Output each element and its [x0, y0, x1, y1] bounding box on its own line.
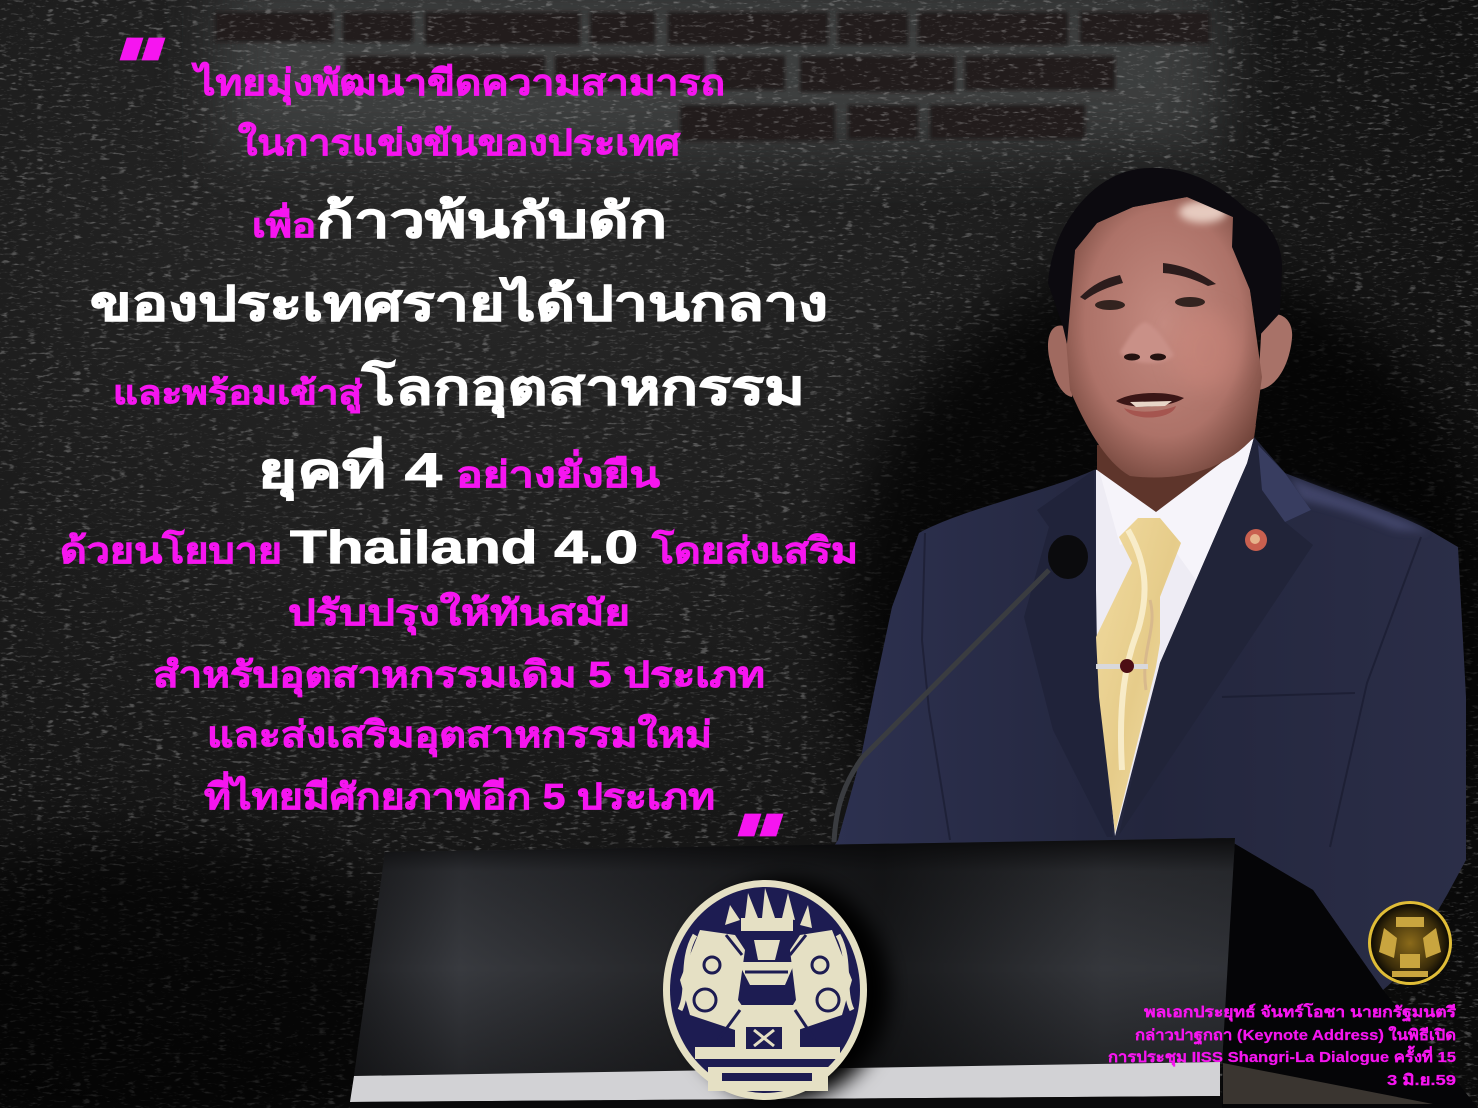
caption line 2: กล่าวปาฐกถา (Keynote Address) ในพิธีเปิด: [1135, 1026, 1456, 1045]
face: [1066, 197, 1262, 477]
quote line 11: ที่ไทยมีศักยภาพอีก 5 ประเภท: [204, 771, 715, 817]
left ear: [1048, 326, 1078, 397]
mouth: [1116, 393, 1184, 418]
eyebrows: [1080, 263, 1216, 300]
main quote text: [60, 38, 858, 836]
quote line 3: เพื่อ: [252, 202, 316, 244]
government seal emblem: [663, 880, 867, 1100]
caption line 4: 3 มิ.ย.59: [1387, 1071, 1456, 1089]
gold tie: [1096, 518, 1181, 833]
hair: [1048, 168, 1282, 344]
seal shadow: [681, 878, 889, 1102]
quote line 7: ด้วยนโยบาย: [60, 529, 282, 571]
nose: [1120, 322, 1174, 363]
podium shading: [354, 838, 1235, 1076]
caption line 1: พลเอกประยุทธ์ จันทร์โอชา นายกรัฐมนตรี: [1144, 1002, 1457, 1022]
closing quote mark: [738, 814, 783, 836]
right lapel: [1119, 437, 1313, 835]
suit jacket: [834, 437, 1466, 990]
sleeve seams and pocket: [922, 533, 1421, 847]
quote line 6: [258, 436, 660, 501]
white shirt: [1096, 437, 1254, 836]
microphone: [834, 535, 1088, 842]
eyes: [1095, 297, 1205, 310]
quote line 6: อย่างยั่งยืน: [456, 449, 660, 495]
lapel badge: [1245, 529, 1267, 551]
forehead highlight: [1179, 201, 1227, 223]
white podium strip: [350, 1062, 1220, 1102]
quote line 7: Thailand 4.0: [290, 521, 638, 573]
cheek shading: [1171, 310, 1239, 390]
opening quote mark: [120, 38, 165, 60]
quote line 5: โลกอุตสาหกรรม: [361, 359, 805, 418]
quote line 6: ยุคที่ 4: [258, 436, 442, 501]
quote line 2: ในการแข่งขันของประเทศ: [238, 121, 681, 163]
left lapel: [1024, 470, 1113, 837]
tie clip: [1096, 659, 1148, 673]
collar highlight: [1258, 445, 1311, 522]
quote line 7: [60, 521, 858, 573]
quote line 7: โดยส่งเสริม: [651, 529, 858, 571]
quote line 1: ไทยมุ่งพัฒนาขีดความสามารถ: [190, 61, 725, 106]
podium side light band: [1223, 1063, 1433, 1104]
neck: [1097, 425, 1256, 512]
small gold seal: [1368, 901, 1452, 985]
shoulder highlight: [1290, 478, 1428, 532]
speaker portrait: [834, 168, 1466, 990]
caption line 3: การประชุม IISS Shangri-La Dialogue ครั้งที่ 15: [1108, 1045, 1456, 1067]
quote line 5: [113, 359, 805, 418]
quote line 10: และส่งเสริมอุตสาหกรรมใหม่: [207, 713, 712, 758]
podium front: [354, 838, 1235, 1076]
quote line 3: ก้าวพ้นกับดัก: [316, 195, 667, 248]
quote line 4: ของประเทศรายได้ปานกลาง: [90, 275, 828, 331]
quote line 3: [252, 195, 667, 248]
podium right side: [1222, 838, 1478, 1108]
right ear: [1258, 314, 1292, 390]
quote line 9: สำหรับอุตสาหกรรมเดิม 5 ประเภท: [153, 654, 765, 698]
shirt collar points: [1099, 437, 1254, 580]
quote line 8: ปรับปรุงให้ทันสมัย: [288, 591, 630, 636]
attribution caption: [1108, 1002, 1457, 1089]
podium base: [350, 1096, 1222, 1108]
podium: [350, 838, 1478, 1108]
quote line 5: และพร้อมเข้าสู่: [113, 374, 363, 414]
